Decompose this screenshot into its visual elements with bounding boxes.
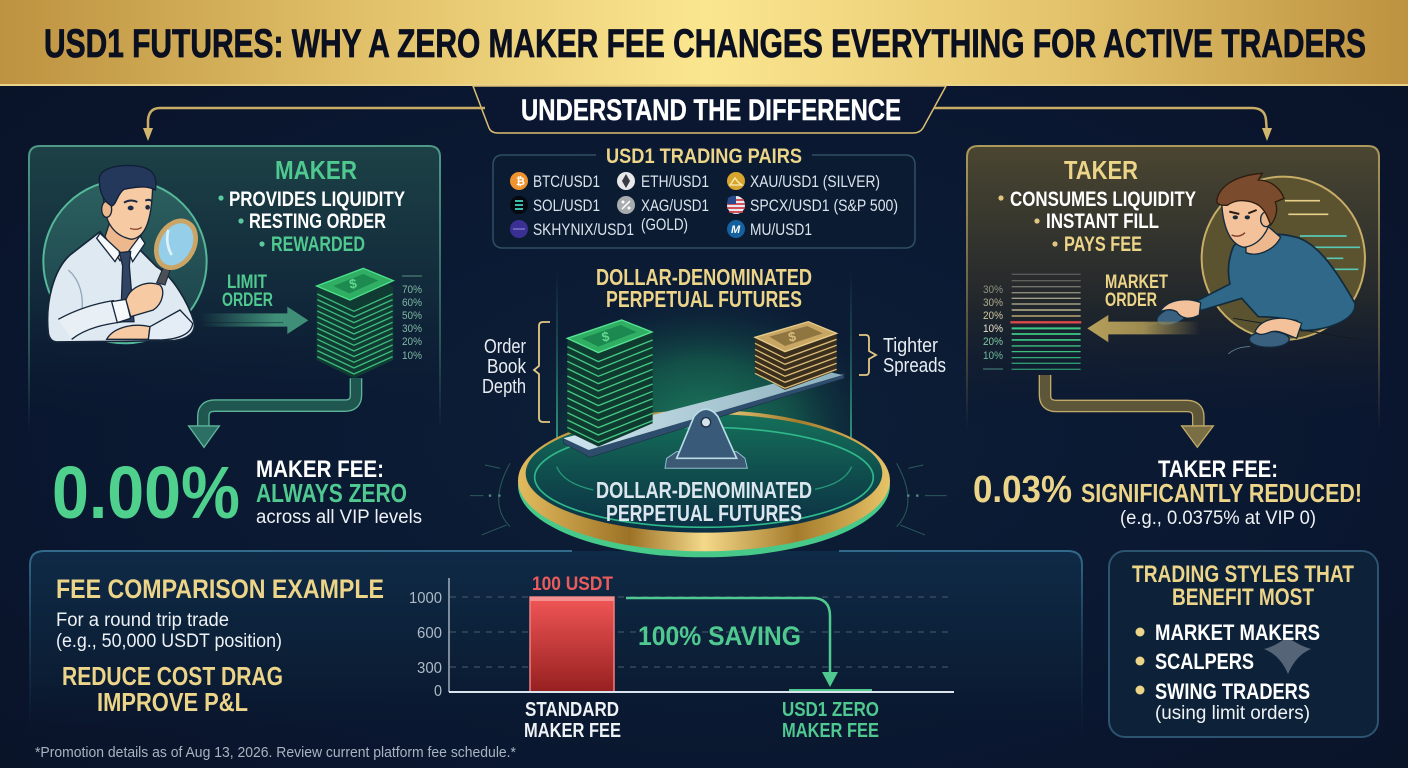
arrow: to taker panel — [934, 108, 1272, 141]
label: tighter spreads: Spreads — [883, 355, 946, 377]
text block: fee comparison — [56, 574, 384, 717]
list: trading styles: SWING TRADERS — [1155, 679, 1310, 704]
list: taker traits: PAYS FEE — [1064, 233, 1142, 256]
label: order book depth: Order — [484, 336, 526, 358]
taker fee callout: TAKER FEE: — [1158, 456, 1278, 483]
list: maker traits: PROVIDES LIQUIDITY — [229, 188, 405, 211]
pair: spcx: SPCX/USD1 (S&P 500) — [750, 196, 898, 215]
footnote: *Promotion details as of Aug 13, 2026. Review current platform fee schedule.* — [35, 744, 516, 761]
list: taker traits — [998, 188, 1196, 256]
pair: eth — [617, 172, 709, 191]
arrow: limit order into stack — [200, 307, 308, 334]
heading: fee comparison example: FEE COMPARISON EXAMPLE — [56, 574, 384, 604]
pair: btc — [510, 172, 600, 191]
section header: understand the difference — [473, 86, 946, 133]
arrow: saving — [626, 598, 838, 687]
x label: standard maker fee — [524, 699, 621, 742]
list: taker traits: INSTANT FILL — [1046, 210, 1159, 233]
label: order book depth: Depth — [482, 376, 526, 398]
scale: maker percentages: 50% — [402, 310, 422, 322]
list: taker traits: CONSUMES LIQUIDITY — [1010, 188, 1196, 211]
label: limit order: ORDER — [222, 290, 273, 311]
panel: trading styles — [1109, 551, 1378, 737]
panel: taker — [967, 146, 1379, 447]
scale: taker percentages: 30% — [983, 284, 1003, 296]
list: trading styles: MARKET MAKERS — [1155, 620, 1320, 645]
bar chart: maker fee comparison: 300 — [417, 660, 442, 677]
pair: skhynix — [510, 220, 634, 239]
icon: green money stack — [317, 268, 393, 378]
pair: mu: M — [731, 224, 741, 236]
arrow: maker stack to fee — [189, 378, 356, 447]
icon: faint star — [1264, 637, 1311, 674]
icon: green order-book stack: $ — [600, 329, 611, 345]
icon: balance beam and fulcrum — [563, 371, 844, 468]
pair: btc: ₿ — [516, 176, 525, 188]
label: dollar-denominated on ring: DOLLAR-DENOMINATED — [596, 477, 812, 503]
scale: maker percentages: 60% — [402, 297, 422, 309]
taker fee callout: 0.03% — [973, 469, 1072, 511]
pair: sol: SOL/USD1 — [533, 196, 600, 215]
bar: standard maker fee — [530, 597, 614, 692]
heading: trading styles: BENEFIT MOST — [1172, 584, 1314, 611]
label: dollar-denominated on ring — [596, 477, 812, 526]
scale: taker percentages: 10% — [983, 350, 1003, 362]
label: dollar-denominated on ring: PERPETUAL FUTURES — [606, 500, 802, 526]
label: 100% saving: 100% SAVING — [638, 621, 801, 651]
label: limit order: LIMIT — [227, 272, 267, 293]
title banner — [0, 0, 1408, 86]
heading: dollar-denominated (gold): PERPETUAL FUTURES — [606, 286, 802, 312]
x label: usd1 zero maker fee — [782, 699, 879, 742]
maker fee callout: across all VIP levels — [256, 507, 422, 528]
x label: usd1 zero maker fee: MAKER FEE — [782, 720, 879, 742]
scale: taker percentages: 30% — [983, 297, 1003, 309]
icon: green money stack: $ — [348, 276, 358, 292]
pair: btc: BTC/USD1 — [533, 172, 600, 191]
maker fee callout: MAKER FEE: — [256, 456, 384, 483]
pair: xau: XAU/USD1 (SILVER) — [750, 172, 880, 191]
label: order book depth — [482, 322, 550, 422]
scale: maker percentages: 30% — [402, 323, 422, 335]
x label: usd1 zero maker fee: USD1 ZERO — [782, 699, 879, 721]
pair: xag — [617, 196, 709, 215]
description — [56, 610, 282, 652]
maker fee callout: 0.00% — [52, 451, 240, 534]
panel: usd1 trading pairs — [493, 145, 915, 248]
label: tighter spreads — [859, 335, 946, 377]
decorative ring — [470, 410, 947, 557]
scale: maker percentages: 20% — [402, 336, 422, 348]
callout: reduce cost drag: REDUCE COST DRAG — [62, 661, 283, 691]
list: maker traits: RESTING ORDER — [249, 210, 386, 233]
bottom panel: fee comparison — [30, 551, 1082, 735]
heading: trading pairs: USD1 TRADING PAIRS — [606, 145, 802, 168]
label: order book depth: Book — [487, 356, 527, 378]
heading: taker: TAKER — [1064, 155, 1138, 185]
pair: eth: ETH/USD1 — [641, 172, 709, 191]
pair: skhynix: SKHYNIX/USD1 — [533, 220, 634, 239]
heading: dollar-denominated (gold) — [596, 264, 812, 312]
taker fee callout: (e.g., 0.0375% at VIP 0) — [1120, 508, 1316, 529]
scale: maker percentages — [402, 276, 422, 362]
description: (e.g., 50,000 USDT position) — [56, 631, 282, 652]
scale: taker percentages — [983, 284, 1003, 369]
bar chart: maker fee comparison — [409, 574, 954, 742]
list: trading styles — [1136, 620, 1320, 724]
list: trading styles: (using limit orders) — [1155, 703, 1310, 724]
scale: taker percentages: 20% — [983, 310, 1003, 322]
value: 100 usdt: 100 USDT — [532, 574, 613, 595]
chart: order book ladder — [1010, 274, 1081, 369]
panel: maker — [29, 146, 440, 447]
scale: taker percentages: 20% — [983, 336, 1003, 348]
list: maker traits — [218, 188, 405, 256]
pair: xag: XAG/USD1 — [641, 196, 709, 215]
heading: maker: MAKER — [275, 155, 357, 185]
pair: sol — [510, 196, 600, 215]
scale: maker percentages: 10% — [402, 350, 422, 362]
icon: maker man with magnifying glass — [43, 165, 207, 343]
arrow: taker book to fee — [1045, 375, 1213, 447]
scale: maker percentages: 70% — [402, 284, 422, 296]
heading: trading styles — [1132, 561, 1354, 611]
list: trading styles: SCALPERS — [1155, 649, 1254, 674]
scale: taker percentages: 10% — [983, 323, 1003, 335]
label: market order: MARKET — [1105, 272, 1168, 293]
icon: green order-book stack — [567, 320, 653, 447]
icon: taker man with mice — [1138, 173, 1365, 354]
callout: reduce cost drag: IMPROVE P&L — [97, 687, 248, 717]
bar chart: maker fee comparison: 1000 — [409, 590, 442, 607]
taker fee callout — [973, 456, 1362, 529]
maker fee callout — [52, 451, 422, 534]
bar chart: maker fee comparison: 600 — [417, 625, 442, 642]
arrow: market order into order book — [1087, 315, 1200, 342]
bar chart: maker fee comparison: 0 — [434, 683, 442, 700]
icon: gold spread stack — [755, 322, 837, 390]
maker fee callout: ALWAYS ZERO — [256, 478, 407, 508]
icon: gold spread stack: $ — [787, 329, 798, 345]
section header: understand the difference: UNDERSTAND THE DIFFERENCE — [521, 94, 901, 127]
arrow: to maker panel — [143, 108, 485, 141]
list: maker traits: REWARDED — [271, 233, 365, 256]
label: limit order — [222, 272, 273, 311]
description: For a round trip trade — [56, 610, 229, 631]
x label: standard maker fee: STANDARD — [525, 699, 619, 721]
pair note: gold: (GOLD) — [641, 215, 688, 234]
heading: dollar-denominated (gold): DOLLAR-DENOMINATED — [596, 264, 812, 290]
center: glass pedestal and balance scale — [470, 264, 947, 557]
label: market order: ORDER — [1105, 290, 1157, 311]
x label: standard maker fee: MAKER FEE — [524, 720, 621, 742]
pair: mu: MU/USD1 — [750, 220, 812, 239]
heading: trading styles: TRADING STYLES THAT — [1132, 561, 1354, 588]
label: tighter spreads: Tighter — [883, 335, 938, 357]
label: market order — [1105, 272, 1168, 311]
glass column — [557, 270, 851, 492]
pair: mu — [727, 220, 812, 239]
callout: reduce cost drag — [62, 661, 283, 717]
bar: usd1 zero — [789, 689, 872, 692]
